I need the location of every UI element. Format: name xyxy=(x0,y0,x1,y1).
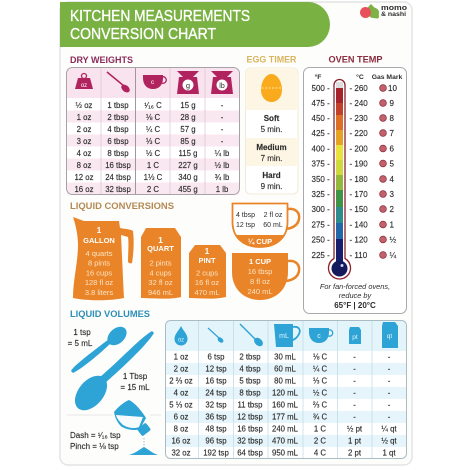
icon: pound scale xyxy=(211,71,233,94)
icon: cup xyxy=(143,75,166,89)
dry weights values: ½ C xyxy=(146,149,161,158)
dry weights values: 1 C xyxy=(147,161,159,170)
dry weights values: 1 oz xyxy=(77,113,91,122)
liquid volumes values: 16 tbsp xyxy=(237,424,263,434)
liquid volumes values: 16 oz xyxy=(171,436,191,446)
gas mark icons and values: 2 xyxy=(390,205,394,214)
heading: egg timer: EGG TIMER xyxy=(246,54,297,64)
icon: pint carton: 16 fl oz xyxy=(195,278,219,287)
liquid volumes values: 6 oz xyxy=(174,412,188,422)
icon: gallon jug: GALLON xyxy=(83,236,115,245)
dry weights values: 16 tbsp xyxy=(105,161,131,170)
egg timer values xyxy=(256,114,287,191)
label: 1 tbsp: = 15 mL xyxy=(120,383,150,392)
dry weights values: - xyxy=(221,125,224,134)
icon: pound scale: lb xyxy=(219,83,225,90)
liquid volumes values: 160 mL xyxy=(272,400,299,410)
liquid volumes values: 2 pt xyxy=(348,448,362,458)
dry weights values: ⅛ C xyxy=(146,113,161,122)
title banner: CONVERSION CHART xyxy=(70,26,216,43)
label: 1 tsp: 1 tsp xyxy=(73,328,91,337)
icon: quart carton xyxy=(141,228,181,299)
dry weights values: ¹⁄₁₆ C xyxy=(144,101,162,110)
liquid volumes values: 1 qt xyxy=(382,448,396,458)
liquid volumes values: - xyxy=(388,364,391,374)
temperature values: - 120 xyxy=(350,236,368,244)
temperature values: 225 - xyxy=(312,251,330,260)
icon: quarter cup: 12 tsp xyxy=(236,222,255,229)
egg timer values: Medium xyxy=(256,143,287,152)
icon: oz weight xyxy=(75,74,93,89)
icon: gallon jug: 4 quarts xyxy=(85,249,113,258)
icon: quart carton: 2 pints xyxy=(149,258,172,268)
egg timer values: Soft xyxy=(264,114,280,123)
icon: c cup: c xyxy=(317,333,321,340)
dry weights values: 1 tbsp xyxy=(107,101,129,110)
dry weights values: 8 tbsp xyxy=(107,149,129,158)
liquid volumes values: 1 oz xyxy=(174,352,188,362)
icon: quarter cup: 60 mL xyxy=(263,222,283,229)
liquid volumes values: - xyxy=(353,388,356,398)
thermometer xyxy=(328,80,351,279)
liquid volumes values: 48 tsp xyxy=(205,424,227,434)
dry weights values: 15 g xyxy=(180,101,196,110)
liquid volumes values: 4 C xyxy=(314,448,326,458)
gas mark icons and values: 7 xyxy=(390,129,394,138)
gas mark icons and values: 5 xyxy=(390,160,394,168)
liquid volumes values: - xyxy=(353,376,356,386)
dry weights values: 3 oz xyxy=(77,137,91,146)
icon: qt carton: qt xyxy=(387,333,392,340)
icon: teaspoon xyxy=(71,323,130,373)
liquid volumes values: 12 tbsp xyxy=(237,412,263,422)
dry weights values: 6 tbsp xyxy=(107,137,129,146)
icon: pint carton xyxy=(189,245,226,299)
card background xyxy=(60,2,412,465)
liquid volumes values: ⅔ C xyxy=(313,400,328,410)
liquid volumes values: 24 tsp xyxy=(205,388,227,398)
icon: quart carton: 946 mL xyxy=(148,288,173,297)
dry weights values: 12 oz xyxy=(74,173,94,182)
liquid volumes values: ¼ qt xyxy=(381,424,397,434)
dry weights values: - xyxy=(221,101,224,110)
column headers: °F xyxy=(315,73,321,81)
icon: one cup: 8 fl oz xyxy=(250,277,270,286)
icon: egg xyxy=(261,74,282,102)
liquid volumes values: ⅛ C xyxy=(313,352,328,362)
dry weights values: 2 oz xyxy=(77,125,91,134)
panel: egg timer xyxy=(246,68,298,194)
icon: gallon jug: 8 pints xyxy=(88,258,110,268)
dry weights values: 28 g xyxy=(180,113,196,122)
icon: mL mug: mL xyxy=(279,333,289,340)
dry weights values: 340 g xyxy=(178,173,198,182)
heading: oven temp: OVEN TEMP xyxy=(328,54,383,66)
logo: momo and nashi xyxy=(360,4,407,18)
icon: pt carton: pt xyxy=(352,334,358,341)
liquid volumes values: 2 C xyxy=(314,436,326,446)
gas mark icons and values: 6 xyxy=(390,144,394,154)
label: dash and pinch: Dash = ¹⁄₁₆ tsp xyxy=(70,431,121,440)
panel: liquid volumes table xyxy=(166,320,406,458)
dry weights values: 32 tbsp xyxy=(105,185,131,194)
liquid volumes values: ¼ C xyxy=(313,364,328,374)
icon: qt carton xyxy=(382,322,398,348)
liquid volumes values: - xyxy=(388,352,391,362)
temperature values: - 140 xyxy=(350,220,368,230)
liquid volumes values: - xyxy=(353,400,356,410)
icon: pint carton: 2 cups xyxy=(196,268,218,278)
fan-forced note: reduce by xyxy=(339,291,373,300)
temperature values: 475 - xyxy=(312,99,330,108)
icon: quarter cup xyxy=(232,204,299,248)
gas mark icons and values: 1 xyxy=(390,220,394,230)
icon: oz drop xyxy=(174,326,188,346)
fan-forced note xyxy=(320,282,390,310)
liquid volumes values: 8 tbsp xyxy=(239,388,261,398)
egg timer values: Hard xyxy=(262,171,281,180)
dry weights values: 85 g xyxy=(180,137,196,146)
temperature values: - 190 xyxy=(350,160,368,168)
gas mark icons and values: 4 xyxy=(390,175,394,184)
icon: quarter cup: ¼ CUP xyxy=(248,237,272,246)
temperature values: 400 - xyxy=(312,144,330,154)
liquid volumes values: 177 mL xyxy=(272,412,299,422)
liquid volumes values: 32 tbsp xyxy=(237,436,263,446)
temperature values: - 240 xyxy=(350,99,368,108)
temperature values: 450 - xyxy=(312,114,330,123)
icon: quarter cup: 4 tbsp xyxy=(236,212,255,219)
liquid volumes values: 5 tbsp xyxy=(239,376,261,386)
label: 1 tsp xyxy=(68,328,93,348)
panel: dry weights table xyxy=(66,68,240,194)
temperature values: - 150 xyxy=(350,205,368,214)
icon: spoon xyxy=(107,72,131,94)
icon: quart carton: 32 fl oz xyxy=(148,278,173,287)
gas mark icons and values: 10 xyxy=(388,84,397,93)
label: dash and pinch xyxy=(70,431,121,451)
gas mark icons and values: 9 xyxy=(390,99,394,108)
icon: oz weight: oz xyxy=(81,83,87,89)
temperature values: - 110 xyxy=(350,251,368,260)
temperature values: - 200 xyxy=(350,144,368,154)
dry weights values: 1 lb xyxy=(216,185,229,194)
icon: pint carton: PINT xyxy=(198,256,216,265)
icon: quarter cup: 2 fl oz xyxy=(264,212,283,219)
liquid volumes values: ½ pt xyxy=(347,424,363,434)
liquid volumes values: 32 tsp xyxy=(205,400,227,410)
icon: gallon jug xyxy=(73,217,134,300)
icon: quart carton: 1 xyxy=(158,235,163,245)
dry weights values: 8 oz xyxy=(77,161,91,170)
icon: tablespoon small xyxy=(240,324,265,348)
temperature values xyxy=(312,84,368,260)
liquid volumes values: 5 ⅓ oz xyxy=(169,400,193,410)
heading: liquid conversions: LIQUID CONVERSIONS xyxy=(70,201,174,211)
dry weights values: - xyxy=(221,137,224,146)
divider between spoons and dash xyxy=(67,414,161,416)
liquid volumes values: - xyxy=(353,364,356,374)
dry weights values: 2 C xyxy=(147,185,159,194)
dry weights values: ¾ lb xyxy=(215,173,230,182)
liquid volumes values: 470 mL xyxy=(272,436,299,446)
dry weights values: 57 g xyxy=(180,125,196,134)
icon: pt carton xyxy=(349,327,361,344)
fan-forced note: 65°F | 20°C xyxy=(334,301,376,310)
fan-forced note: For fan-forced ovens, xyxy=(320,282,390,291)
icon: gallon jug: 3.8 liters xyxy=(85,288,113,297)
egg timer values: 5 min. xyxy=(261,125,282,134)
column headers: Gas Mark xyxy=(372,74,403,81)
dry weights values: 2 tbsp xyxy=(107,113,129,122)
icon: one cup: 240 mL xyxy=(247,287,273,296)
icon: tablespoon xyxy=(69,331,154,416)
dry weights values: 227 g xyxy=(178,161,198,170)
icon: pint carton: 470 mL xyxy=(194,288,220,297)
icon: oz drop: oz xyxy=(178,338,184,344)
liquid volumes values: 32 oz xyxy=(171,448,191,458)
heading: dry weights: DRY WEIGHTS xyxy=(70,55,133,65)
dry weights values: ½ oz xyxy=(76,101,93,110)
dry weights values: ½ lb xyxy=(215,161,230,170)
icon: quart carton: QUART xyxy=(147,244,174,253)
egg timer values: 7 min. xyxy=(261,154,282,163)
temperature values: - 170 xyxy=(350,190,368,199)
liquid volumes values: 120 mL xyxy=(272,388,299,398)
icon: gram scale: g xyxy=(186,81,190,90)
liquid volumes values: - xyxy=(388,388,391,398)
liquid volumes values: 2 tbsp xyxy=(239,352,261,362)
icon: one cup: 1 CUP xyxy=(249,257,271,266)
liquid volumes values: 192 tsp xyxy=(203,448,229,458)
liquid volumes values: 4 tbsp xyxy=(239,364,261,374)
temperature values: - 230 xyxy=(350,114,368,123)
liquid volumes values: 240 mL xyxy=(272,424,299,434)
icon: mL mug xyxy=(274,324,300,347)
liquid volumes values: 30 mL xyxy=(274,352,296,362)
icon: gallon jug: 128 fl oz xyxy=(85,278,113,287)
temperature values: 350 - xyxy=(312,175,330,184)
gas mark icons and values: ½ xyxy=(390,236,396,244)
dry weights values: ⅓ C xyxy=(146,137,161,146)
liquid volumes values: 1 C xyxy=(314,424,326,434)
icon: c cup xyxy=(309,328,333,343)
logo: momo and nashi: & nashi xyxy=(381,12,406,18)
heading: liquid volumes: LIQUID VOLUMES xyxy=(70,309,150,319)
dry weights values: 4 tbsp xyxy=(107,125,129,134)
panel: oven temp xyxy=(304,68,406,314)
liquid volumes values: 80 mL xyxy=(274,376,296,386)
liquid volumes values: - xyxy=(353,352,356,362)
temperature values: 500 - xyxy=(312,84,330,93)
title banner: KITCHEN MEASUREMENTS xyxy=(70,8,250,25)
dry weights values: - xyxy=(221,113,224,122)
liquid volumes values: 2 oz xyxy=(174,364,188,374)
dry weights values: 1⅓ C xyxy=(144,173,163,182)
icon: gram scale xyxy=(177,71,199,94)
temperature values: 325 - xyxy=(312,190,330,199)
liquid volumes values: 16 tsp xyxy=(205,376,227,386)
temperature values: - 180 xyxy=(350,175,368,184)
dry weights values: 115 g xyxy=(179,149,197,158)
liquid volumes values: - xyxy=(353,412,356,422)
icon: gallon jug: 1 xyxy=(97,226,102,235)
temperature values: - 260 xyxy=(350,84,368,93)
icon: pint carton: 1 xyxy=(205,247,210,256)
dry weights values: ¼ C xyxy=(146,125,161,134)
liquid volumes values: 36 tsp xyxy=(205,412,227,422)
liquid volumes values: 8 oz xyxy=(174,424,188,434)
temperature values: 275 - xyxy=(312,220,330,230)
icon: gallon jug: 16 cups xyxy=(86,268,112,278)
temperature values: 425 - xyxy=(312,129,330,138)
dry weights values: 16 oz xyxy=(74,185,94,194)
temperature values: 375 - xyxy=(312,160,330,168)
gas mark icons and values xyxy=(380,84,397,260)
gas mark icons and values: 3 xyxy=(390,190,394,199)
temperature values: 250 - xyxy=(312,236,330,244)
liquid volumes values: 950 mL xyxy=(272,448,299,458)
icon: one cup xyxy=(232,253,299,300)
liquid volumes values: - xyxy=(388,400,391,410)
liquid volumes values: 60 mL xyxy=(274,364,296,374)
icon: cup: c xyxy=(151,79,155,86)
dry weights values: ¼ lb xyxy=(215,149,230,158)
liquid volumes values: 96 tsp xyxy=(205,436,227,446)
dry weights values: 455 g xyxy=(178,185,198,194)
liquid volumes values: ½ C xyxy=(313,388,328,398)
liquid volumes values: ¾ C xyxy=(313,412,328,422)
liquid volumes values: 4 oz xyxy=(174,388,188,398)
column headers xyxy=(315,73,403,81)
liquid volumes values xyxy=(169,352,397,458)
icon: one cup: 16 tbsp xyxy=(248,267,272,276)
label: 1 tsp: = 5 mL xyxy=(68,339,93,348)
egg timer values: 9 min. xyxy=(261,182,282,191)
icon: salt shaker xyxy=(114,400,158,455)
liquid volumes values: 64 tbsp xyxy=(237,448,263,458)
liquid volumes values: ½ qt xyxy=(381,436,397,446)
liquid volumes values: - xyxy=(388,376,391,386)
dry weights values: 24 tbsp xyxy=(105,173,131,182)
label: 1 tbsp xyxy=(120,372,150,392)
temperature values: 300 - xyxy=(312,205,330,214)
gas mark icons and values: ¼ xyxy=(390,251,396,260)
icon: quart carton: 4 cups xyxy=(149,268,172,278)
liquid volumes values: ⅓ C xyxy=(313,376,328,386)
liquid volumes values: 1 pt xyxy=(348,436,362,446)
liquid volumes values: 2 ⅔ oz xyxy=(169,376,193,386)
temperature values: - 220 xyxy=(350,129,368,138)
gas mark icons and values: 8 xyxy=(390,114,394,123)
liquid volumes values: 12 tsp xyxy=(205,364,227,374)
title banner xyxy=(60,2,330,47)
liquid volumes values: 11 tbsp xyxy=(238,400,263,410)
column headers: °C xyxy=(356,73,364,81)
liquid volumes values: - xyxy=(388,412,391,422)
label: dash and pinch: Pinch = ⅛ tsp xyxy=(70,442,119,451)
label: 1 tbsp: 1 Tbsp xyxy=(123,372,148,381)
logo: momo and nashi: momo xyxy=(381,5,407,12)
icon: teaspoon small xyxy=(208,328,224,344)
liquid volumes values: 6 tsp xyxy=(208,352,225,362)
dry weights values: 4 oz xyxy=(77,149,91,158)
dry weights values xyxy=(74,101,230,194)
